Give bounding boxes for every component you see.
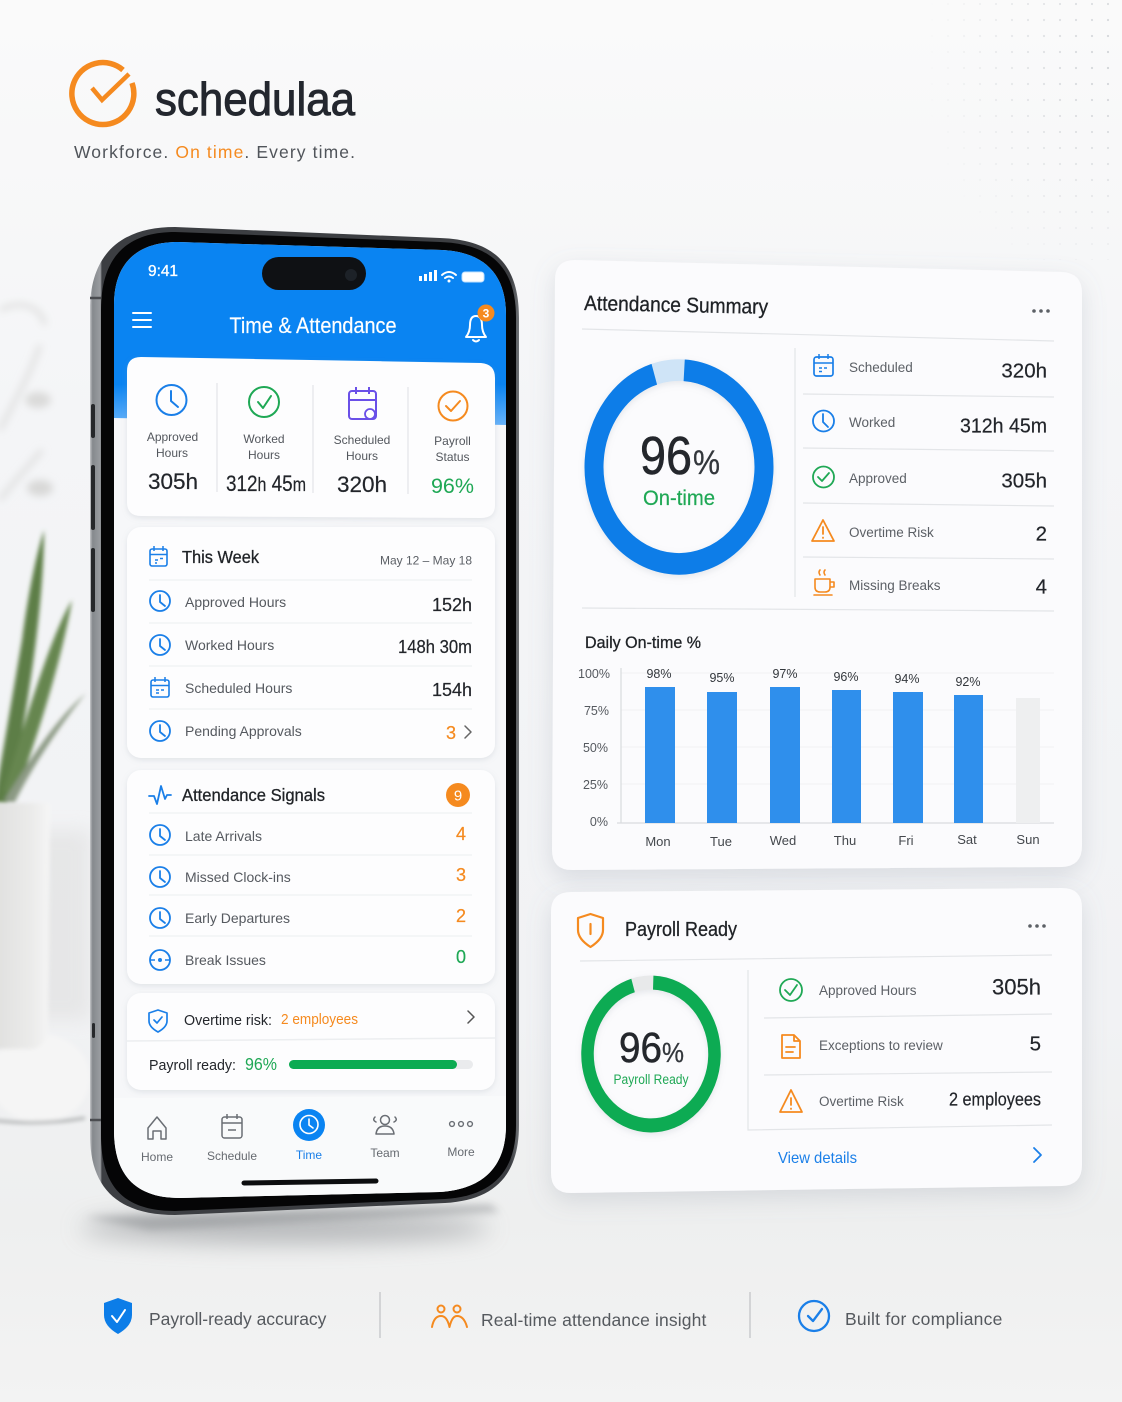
feature: insight: Real-time attendance insight bbox=[481, 1310, 707, 1330]
donut chart bbox=[589, 364, 769, 570]
row: worked: Worked bbox=[849, 415, 895, 430]
row: missed: Missed Clock-ins bbox=[185, 869, 291, 885]
feature: accuracy: Payroll-ready accuracy bbox=[149, 1309, 327, 1329]
status time: 9:41 bbox=[148, 263, 178, 280]
bell with badge: 3 bbox=[483, 306, 490, 320]
dynamic island bbox=[262, 257, 366, 290]
row: scheduled: Scheduled bbox=[849, 360, 913, 375]
app header bbox=[114, 240, 506, 425]
nav: home: Home bbox=[141, 1150, 173, 1164]
row: missing breaks: 4 bbox=[1036, 576, 1047, 598]
row: pending bbox=[150, 721, 471, 743]
payroll text: Payroll ready: bbox=[149, 1058, 236, 1074]
row: approved: Approved Hours bbox=[185, 594, 286, 610]
stat: worked bbox=[226, 387, 306, 496]
donut chart: Payroll Ready bbox=[614, 1072, 689, 1087]
row: late bbox=[150, 824, 466, 845]
bar chart: Sun bbox=[1016, 832, 1040, 847]
row: missed: 3 bbox=[456, 865, 466, 885]
stat: payroll: 96% bbox=[431, 474, 474, 498]
stat: payroll: Status bbox=[435, 450, 470, 464]
row: worked: 312h 45m bbox=[960, 414, 1047, 438]
panel: attendance summary bbox=[552, 260, 1082, 870]
bar chart: 94% bbox=[894, 672, 920, 686]
date range: May 12 – May 18 bbox=[380, 554, 472, 568]
progress bar bbox=[289, 1060, 473, 1069]
row: scheduled bbox=[151, 677, 472, 700]
badge bbox=[446, 783, 470, 807]
row: late: Late Arrivals bbox=[185, 828, 262, 844]
nav: team bbox=[370, 1116, 400, 1160]
bar chart: 75% bbox=[584, 704, 609, 718]
row: worked bbox=[813, 410, 1047, 438]
bar chart: 100% bbox=[578, 667, 610, 681]
bar chart: 97% bbox=[772, 667, 798, 681]
wordmark: schedulaa bbox=[155, 73, 355, 125]
footer features bbox=[104, 1292, 1003, 1338]
nav: schedule bbox=[207, 1114, 257, 1163]
bar chart: 96% bbox=[833, 670, 859, 684]
heading: This Week bbox=[182, 547, 259, 567]
stat: approved bbox=[147, 385, 198, 494]
row: overtime risk: 2 employees bbox=[949, 1090, 1041, 1110]
bar chart: Tue bbox=[710, 834, 732, 849]
bar chart: 0% bbox=[590, 815, 608, 829]
panel: overtime and payroll: 96% bbox=[245, 1054, 277, 1074]
row: exceptions bbox=[782, 1032, 1041, 1058]
feature: insight bbox=[432, 1306, 707, 1330]
panel: overtime and payroll: 2 employees bbox=[281, 1012, 358, 1028]
row: scheduled: 154h bbox=[432, 680, 472, 700]
row: scheduled: Scheduled Hours bbox=[185, 680, 292, 696]
row: break bbox=[150, 947, 466, 970]
bar chart: 98% bbox=[646, 667, 672, 681]
stat: approved: Approved bbox=[147, 430, 198, 444]
feature: compliance bbox=[799, 1301, 1003, 1331]
heading: Payroll Ready bbox=[625, 919, 737, 941]
nav: time active: Time bbox=[296, 1148, 322, 1162]
bar chart: Wed bbox=[770, 833, 796, 848]
row: approved hours: Approved Hours bbox=[819, 983, 917, 998]
screen bbox=[114, 240, 506, 1200]
stat: payroll: Payroll bbox=[434, 434, 471, 448]
stat: approved: 305h bbox=[148, 469, 198, 494]
row: break: Break Issues bbox=[185, 952, 266, 968]
panel: attendance signals bbox=[127, 770, 495, 984]
stat: scheduled: Hours bbox=[346, 449, 378, 463]
stat: payroll bbox=[431, 392, 474, 498]
chevron bbox=[468, 1011, 474, 1023]
heading: Attendance Signals bbox=[182, 785, 325, 805]
row: pending: Pending Approvals bbox=[185, 723, 302, 739]
nav: schedule: Schedule bbox=[207, 1149, 257, 1163]
row: exceptions: 5 bbox=[1030, 1032, 1041, 1056]
menu dots bbox=[1028, 924, 1046, 928]
link: view details: View details bbox=[778, 1150, 857, 1167]
row: approved: 305h bbox=[1001, 470, 1047, 492]
row: approved hours bbox=[780, 974, 1041, 1001]
phone title: Time & Attendance bbox=[230, 313, 396, 338]
row: overtime risk bbox=[780, 1090, 1041, 1112]
row: pending: 3 bbox=[446, 723, 456, 743]
row: approved bbox=[813, 466, 1047, 492]
nav: time active bbox=[293, 1109, 325, 1162]
panel: payroll ready bbox=[551, 888, 1082, 1193]
bottom navigation bbox=[114, 1096, 506, 1198]
bell with badge bbox=[466, 304, 494, 342]
nav: team: Team bbox=[370, 1146, 400, 1160]
phone bbox=[90, 227, 519, 1215]
heading: Attendance Summary bbox=[584, 292, 769, 319]
donut chart: 96 bbox=[619, 1024, 662, 1072]
row: late: 4 bbox=[456, 824, 466, 844]
panel: this week bbox=[127, 527, 495, 758]
row: missed bbox=[150, 865, 466, 887]
row: scheduled: 320h bbox=[1001, 360, 1047, 382]
logo bbox=[72, 63, 355, 162]
nav: more: More bbox=[447, 1145, 475, 1159]
row: overtime risk: Overtime Risk bbox=[849, 525, 934, 540]
donut chart: 96 bbox=[640, 426, 692, 486]
row: exceptions: Exceptions to review bbox=[819, 1038, 943, 1053]
donut chart: % bbox=[693, 444, 720, 482]
icon: shield bbox=[149, 1010, 167, 1032]
row: worked: 148h 30m bbox=[398, 637, 472, 657]
chevron bbox=[1034, 1148, 1041, 1162]
tagline: Workforce. On time. Every time. bbox=[74, 142, 355, 162]
bar chart: 50% bbox=[583, 741, 608, 755]
stat: scheduled: Scheduled bbox=[334, 433, 390, 447]
row: break: 0 bbox=[456, 947, 466, 967]
icon: shield bbox=[578, 914, 603, 947]
donut chart: On-time bbox=[643, 487, 715, 510]
bar chart: 95% bbox=[709, 671, 735, 685]
row: missing breaks: Missing Breaks bbox=[849, 578, 941, 593]
row: approved bbox=[150, 591, 472, 615]
stat: worked: Hours bbox=[248, 448, 280, 462]
icon: calendar bbox=[150, 546, 167, 566]
feature: compliance: Built for compliance bbox=[845, 1309, 1003, 1329]
donut chart: % bbox=[662, 1037, 684, 1068]
bar chart bbox=[578, 667, 1054, 849]
bar chart: Fri bbox=[898, 833, 914, 848]
row: overtime risk: 2 bbox=[1036, 522, 1047, 546]
heading: daily on-time: Daily On-time % bbox=[585, 634, 701, 652]
feature: accuracy bbox=[104, 1298, 327, 1334]
hamburger icon bbox=[133, 313, 151, 327]
bar chart: Mon bbox=[645, 834, 671, 849]
row: overtime risk: Overtime Risk bbox=[819, 1094, 904, 1109]
overtime text: Overtime risk: bbox=[184, 1013, 272, 1029]
nav: home bbox=[141, 1117, 173, 1164]
stat: worked: Worked bbox=[243, 432, 285, 446]
row: approved hours: 305h bbox=[992, 974, 1041, 1000]
panel: top stats bbox=[127, 357, 495, 518]
row: approved: Approved bbox=[849, 471, 907, 486]
phone frame bbox=[90, 227, 519, 1215]
menu dots bbox=[1032, 309, 1050, 313]
bar chart: Thu bbox=[834, 833, 856, 848]
bar chart: 25% bbox=[583, 778, 608, 792]
row: scheduled bbox=[814, 354, 1047, 382]
stat: approved: Hours bbox=[156, 446, 188, 460]
row: early: 2 bbox=[456, 906, 466, 926]
bar chart: 92% bbox=[955, 675, 981, 689]
status icons bbox=[419, 270, 484, 282]
badge: 9 bbox=[454, 788, 462, 804]
stat: worked: 312h 45m bbox=[226, 471, 306, 496]
logo mark bbox=[72, 63, 134, 125]
home indicator bbox=[244, 1181, 376, 1183]
stat: scheduled bbox=[334, 387, 390, 497]
bar chart: Sat bbox=[957, 832, 977, 847]
nav: more bbox=[447, 1122, 475, 1159]
row: early bbox=[150, 906, 466, 928]
row: approved: 152h bbox=[432, 595, 472, 615]
icon: pulse bbox=[149, 786, 171, 804]
donut chart bbox=[585, 980, 717, 1128]
row: overtime risk bbox=[812, 520, 1047, 546]
row: missing breaks bbox=[814, 570, 1047, 598]
panel: overtime and payroll bbox=[127, 993, 495, 1090]
row: early: Early Departures bbox=[185, 910, 290, 926]
row: worked: Worked Hours bbox=[185, 637, 274, 653]
stat: scheduled: 320h bbox=[337, 472, 387, 497]
row: worked bbox=[150, 635, 472, 657]
